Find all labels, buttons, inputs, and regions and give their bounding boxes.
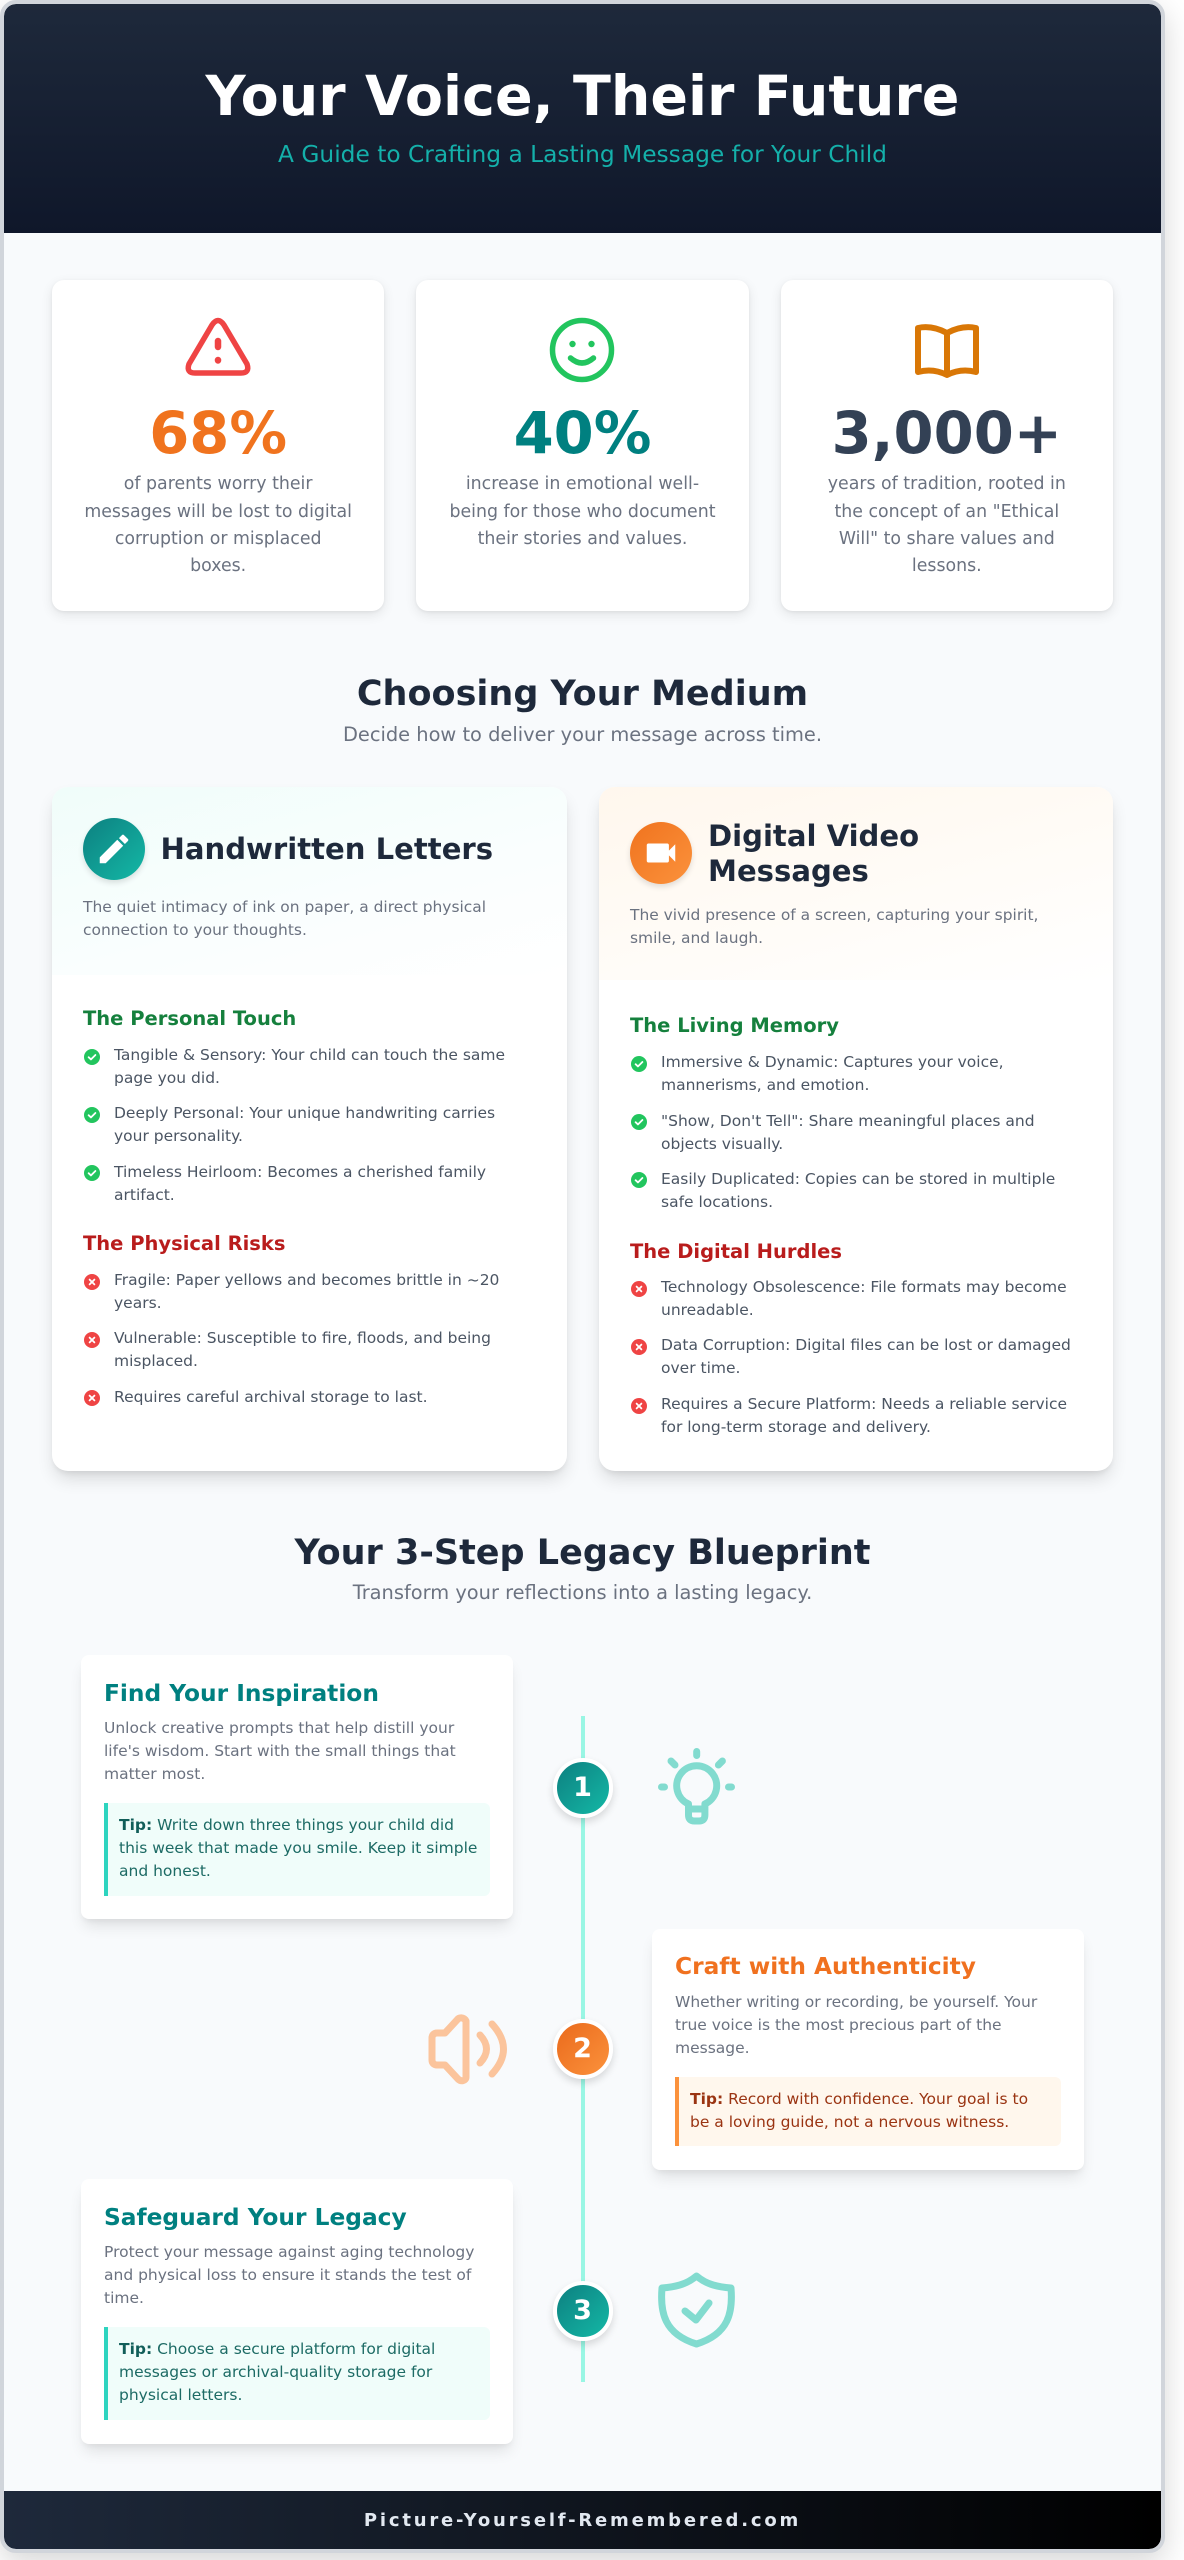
stat text: increase in emotional well-: [466, 474, 699, 494]
card title: Handwritten Letters: [160, 832, 493, 866]
step text: true voice is the most precious part of the: [675, 2016, 1002, 2034]
con item: years.: [114, 1294, 162, 1312]
card description: [630, 906, 1038, 947]
con item: over time.: [661, 1359, 740, 1377]
con item: [631, 1336, 1071, 1377]
pro item: Immersive & Dynamic: Captures your voice,: [661, 1053, 1004, 1071]
footer text: Picture-Yourself-Remembered.com: [364, 2510, 801, 2530]
icon: light bulb: [658, 1748, 735, 1824]
step text: Whether writing or recording, be yourself. Your: [675, 1993, 1037, 2011]
card title: [708, 818, 919, 888]
step text: matter most.: [104, 1765, 205, 1783]
pro item: safe locations.: [661, 1193, 773, 1211]
card description: smile, and laugh.: [630, 929, 763, 947]
stat number: 40%: [514, 400, 651, 467]
pro item: "Show, Don't Tell": Share meaningful places and: [661, 1112, 1035, 1130]
icon: smiley: [550, 318, 614, 382]
con item: [84, 1329, 491, 1370]
pro item: objects visually.: [661, 1135, 783, 1153]
footer: [4, 2491, 1161, 2549]
panel: stat 68%: [52, 280, 384, 611]
subheading: cons: The Physical Risks: [83, 1232, 285, 1255]
step title: Craft with Authenticity: [675, 1953, 976, 1980]
pro item: Easily Duplicated: Copies can be stored in multiple: [661, 1170, 1055, 1188]
card title: Digital Video: [708, 818, 919, 852]
icon: pencil: [83, 818, 145, 880]
card description: The quiet intimacy of ink on paper, a direct physical: [83, 898, 486, 916]
pro item: [84, 1046, 505, 1087]
pro item: Timeless Heirloom: Becomes a cherished family: [114, 1163, 486, 1181]
stat text: [449, 474, 716, 549]
step text: [104, 1719, 456, 1783]
stat text: their stories and values.: [478, 529, 687, 549]
step text: [104, 2243, 474, 2307]
step 1 number: [552, 1758, 612, 1818]
icon: warning triangle: [186, 318, 250, 376]
pro item: page you did.: [114, 1069, 220, 1087]
step text: Protect your message against aging technology: [104, 2243, 474, 2261]
step 2 number: 2: [573, 2033, 592, 2064]
pro item: [631, 1053, 1004, 1094]
con item: Data Corruption: Digital files can be lost or damaged: [661, 1336, 1071, 1354]
stat number: 3,000+: [832, 400, 1062, 467]
pro item: your personality.: [114, 1127, 243, 1145]
stat text: messages will be lost to digital: [84, 502, 352, 522]
con item: [631, 1395, 1067, 1436]
pro item: [631, 1112, 1035, 1153]
pro item: mannerisms, and emotion.: [661, 1076, 869, 1094]
panel: step 3 card: [81, 2179, 513, 2444]
pro item: [84, 1163, 486, 1204]
panel: stat 3,000+: [781, 280, 1113, 611]
title: Your Voice, Their Future: [206, 64, 959, 129]
step text: life's wisdom. Start with the small things that: [104, 1742, 456, 1760]
tip: Tip: Record with confidence. Your goal is to: [690, 2090, 1028, 2108]
subheading: blueprint: Transform your reflections into a lasting legacy.: [353, 1581, 812, 1604]
icon: video camera: [630, 822, 692, 884]
tip: and honest.: [119, 1862, 211, 1880]
con item: Fragile: Paper yellows and becomes brittle in ~20: [114, 1271, 499, 1289]
subheading: cons: The Digital Hurdles: [630, 1240, 842, 1262]
tip: messages or archival-quality storage for: [119, 2363, 432, 2381]
icon: shield: [658, 2272, 735, 2348]
con item: misplaced.: [114, 1352, 198, 1370]
con item: Vulnerable: Susceptible to fire, floods, and being: [114, 1329, 491, 1347]
heading: blueprint: Your 3-Step Legacy Blueprint: [294, 1533, 871, 1573]
tip: [675, 2077, 1061, 2146]
panel: stat 40%: [416, 280, 749, 611]
subheading: pros: The Personal Touch: [83, 1007, 296, 1030]
pro item: artifact.: [114, 1186, 175, 1204]
tip: physical letters.: [119, 2386, 242, 2404]
header background: [52, 787, 566, 975]
step 2 number: [552, 2019, 612, 2079]
tip: Tip: Choose a secure platform for digital: [119, 2340, 435, 2358]
subtitle: A Guide to Crafting a Lasting Message for Your Child: [278, 141, 887, 168]
con item: unreadable.: [661, 1301, 754, 1319]
stat text: being for those who document: [449, 502, 716, 522]
stat text: [84, 474, 352, 576]
stat text: the concept of an "Ethical: [834, 502, 1059, 522]
panel: digital video messages: [598, 787, 1113, 1471]
step title: Find Your Inspiration: [104, 1680, 379, 1707]
step 3 number: [552, 2281, 612, 2341]
stat text: Will" to share values and: [839, 529, 1055, 549]
tip: [104, 1803, 490, 1896]
pro item: Tangible & Sensory: Your child can touch the same: [114, 1046, 505, 1064]
stat text: of parents worry their: [124, 474, 313, 494]
con item: Technology Obsolescence: File formats may become: [661, 1278, 1067, 1296]
pro item: [631, 1170, 1055, 1211]
heading: choosing your medium: Choosing Your Medium: [357, 674, 808, 714]
header background: [598, 787, 1113, 980]
step title: Safeguard Your Legacy: [104, 2204, 407, 2231]
stat text: corruption or misplaced: [115, 529, 322, 549]
step text: time.: [104, 2289, 144, 2307]
card description: connection to your thoughts.: [83, 921, 307, 939]
stat text: [828, 474, 1066, 576]
step 1 number: 1: [573, 1772, 592, 1802]
tip: this week that made you smile. Keep it simple: [119, 1839, 477, 1857]
con item: [631, 1278, 1067, 1319]
pro item: Deeply Personal: Your unique handwriting carries: [114, 1104, 495, 1122]
card description: [82, 898, 486, 939]
step text: and physical loss to ensure it stands the test of: [104, 2266, 471, 2284]
timeline line: [580, 1716, 584, 2382]
stat number: 68%: [149, 400, 287, 467]
icon: speaker: [428, 2014, 507, 2084]
step text: message.: [675, 2039, 750, 2057]
con item: Requires careful archival storage to last.: [114, 1388, 428, 1406]
step 3 number: 3: [573, 2295, 592, 2326]
card description: The vivid presence of a screen, capturing your spirit,: [630, 906, 1038, 924]
stat text: lessons.: [912, 556, 982, 576]
panel: step 1 card: [81, 1655, 513, 1919]
step text: [675, 1993, 1038, 2057]
stat text: boxes.: [190, 556, 246, 576]
stat text: years of tradition, rooted in: [828, 474, 1066, 494]
step text: Unlock creative prompts that help distill your: [104, 1719, 454, 1737]
tip: Tip: Write down three things your child did: [119, 1816, 454, 1834]
panel: handwritten letters: [52, 787, 566, 1471]
tip: [104, 2327, 490, 2420]
header banner: [4, 4, 1161, 233]
icon: open book: [915, 324, 979, 378]
tip: be a loving guide, not a nervous witness.: [690, 2113, 1009, 2131]
subheading: pros: The Living Memory: [630, 1014, 839, 1037]
con item: for long-term storage and delivery.: [661, 1418, 931, 1436]
subheading: medium: Decide how to deliver your message across time.: [343, 723, 822, 746]
card title: Messages: [708, 854, 869, 888]
panel: step 2 card: [652, 1929, 1084, 2170]
con item: Requires a Secure Platform: Needs a reliable service: [661, 1395, 1067, 1413]
con item: [84, 1271, 499, 1312]
pro item: [84, 1104, 495, 1145]
